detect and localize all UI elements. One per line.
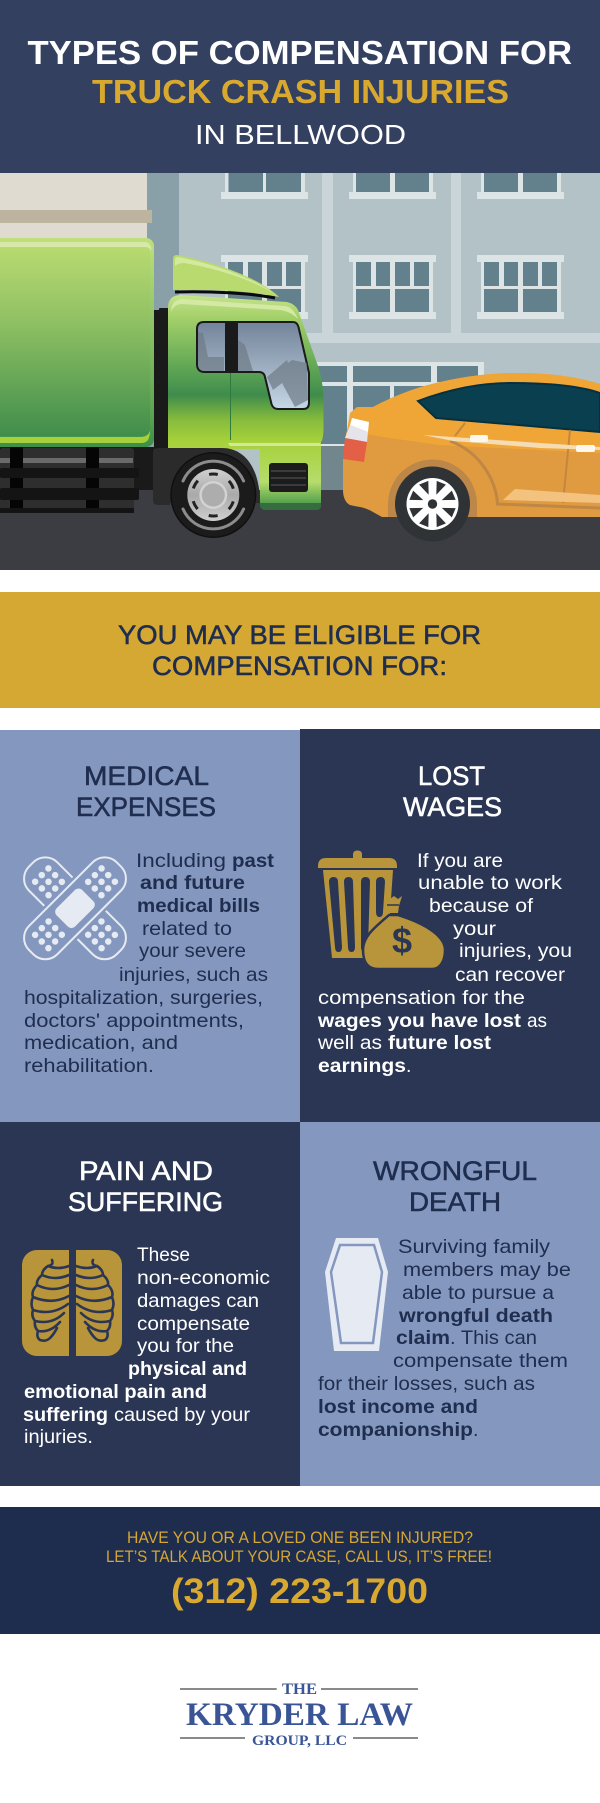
body text: These <box>137 1244 190 1266</box>
body text: medical bills <box>137 895 260 917</box>
body text: companionship <box>318 1419 473 1441</box>
body text: injuries. <box>24 1426 93 1448</box>
body text: compensation for the <box>318 987 525 1009</box>
body text: suffering <box>23 1404 108 1426</box>
door handles <box>470 435 488 442</box>
banner text <box>118 620 481 681</box>
heading: SUFFERING <box>68 1187 223 1217</box>
door line <box>230 372 232 440</box>
icon: bandages <box>17 850 133 966</box>
body text: hospitalization, surgeries, <box>24 987 263 1009</box>
body text: because of <box>429 895 534 917</box>
heading <box>373 1156 537 1217</box>
wheel arch <box>153 448 260 505</box>
header panel <box>0 0 600 173</box>
body text: injuries, such as <box>119 964 268 986</box>
logo: GROUP, LLC <box>252 1733 347 1749</box>
logo: THE <box>282 1681 317 1698</box>
body text: members may be <box>403 1259 571 1281</box>
heading <box>76 761 216 822</box>
call to action text: LET’S TALK ABOUT YOUR CASE, CALL US, IT’S FREE! <box>106 1548 492 1566</box>
body text: future lost <box>388 1032 492 1054</box>
banner text: YOU MAY BE ELIGIBLE FOR <box>118 620 481 650</box>
body text: as <box>527 1010 547 1032</box>
logo: KRYDER LAW <box>186 1697 413 1733</box>
body text: your severe <box>139 940 246 962</box>
heading: DEATH <box>409 1187 501 1217</box>
truck wheel <box>170 452 256 538</box>
ground floor window <box>316 362 484 448</box>
body text: related to <box>142 918 232 940</box>
chassis <box>0 308 168 513</box>
logo <box>180 1681 418 1749</box>
body text <box>24 850 275 1077</box>
car wheel <box>388 460 477 542</box>
heading: WAGES <box>403 792 502 822</box>
body text: . <box>473 1419 478 1441</box>
body text: physical and <box>128 1358 247 1380</box>
call to action text: HAVE YOU OR A LOVED ONE BEEN INJURED? <box>127 1529 473 1547</box>
body text: . This can <box>450 1327 537 1349</box>
body text: lost income and <box>318 1396 478 1418</box>
banner text: COMPENSATION FOR: <box>152 651 447 681</box>
door lines <box>455 423 570 503</box>
call to action text <box>106 1529 492 1566</box>
cab window <box>197 322 309 409</box>
car body <box>343 373 600 517</box>
body text: compensate them <box>393 1350 568 1372</box>
body text: you for the <box>137 1335 234 1357</box>
body text: . <box>406 1055 411 1077</box>
body text: non-economic <box>137 1267 270 1289</box>
heading: LOST <box>418 761 485 791</box>
icon: trash can and money bag <box>318 850 445 969</box>
body text: well as <box>317 1032 382 1054</box>
body text: damages can <box>137 1290 259 1312</box>
body text: can recover <box>455 964 566 986</box>
heading <box>403 761 502 822</box>
body text: If you are <box>417 850 503 872</box>
body text: wages you have lost <box>317 1010 522 1032</box>
body text: for their losses, such as <box>318 1373 535 1395</box>
panel: medical expenses <box>0 730 300 1122</box>
windows row 1 <box>221 173 564 199</box>
icon: rib cage <box>22 1250 122 1356</box>
body text: emotional pain and <box>24 1381 207 1403</box>
body text: earnings <box>318 1055 406 1077</box>
body text: injuries, you <box>459 940 572 962</box>
body text: able to pursue a <box>402 1282 554 1304</box>
building background <box>0 173 600 493</box>
body text: and future <box>140 872 245 894</box>
body text: claim <box>396 1327 450 1349</box>
body text <box>318 1236 571 1441</box>
call to action panel <box>0 1507 600 1634</box>
banner <box>0 592 600 708</box>
cab spoiler <box>173 255 279 298</box>
bumper strip <box>228 443 322 446</box>
body text: medication, and <box>24 1032 178 1054</box>
heading: EXPENSES <box>76 792 216 822</box>
body text: past <box>232 850 275 872</box>
panel: lost wages <box>300 729 600 1122</box>
windows row 2 <box>221 255 564 319</box>
body text: compensate <box>137 1313 250 1335</box>
body text: your <box>453 918 497 940</box>
cab body <box>168 295 324 510</box>
body text: unable to work <box>418 872 562 894</box>
body text: Including <box>136 850 226 872</box>
heading: WRONGFUL <box>373 1156 537 1186</box>
icon: coffin <box>325 1238 388 1351</box>
body text: doctors' appointments, <box>24 1010 244 1032</box>
road <box>0 490 600 570</box>
illustration: truck crash scene <box>0 173 600 570</box>
heading <box>68 1156 223 1217</box>
heading: MEDICAL <box>84 761 209 791</box>
title line 3: IN BELLWOOD <box>195 119 406 150</box>
grille <box>269 463 308 492</box>
taillight <box>343 418 369 462</box>
title line 1: TYPES OF COMPENSATION FOR <box>28 35 572 72</box>
body reflection <box>423 435 600 450</box>
lower bumper band <box>260 503 321 510</box>
heading: PAIN AND <box>79 1156 213 1186</box>
body text: rehabilitation. <box>24 1055 154 1077</box>
phone number: (312) 223-1700 <box>171 1572 428 1611</box>
car upper body <box>347 373 600 453</box>
icon: trash can and money bag: $ <box>392 920 412 961</box>
panel: wrongful death <box>300 1122 600 1486</box>
car <box>343 373 600 542</box>
cargo box <box>0 238 154 447</box>
body text: Surviving family <box>398 1236 550 1258</box>
car side window <box>418 383 600 432</box>
title line 2: TRUCK CRASH INJURIES <box>92 74 509 111</box>
body text: wrongful death <box>398 1305 553 1327</box>
body text <box>317 850 572 1077</box>
panel: pain and suffering <box>0 1122 300 1486</box>
truck <box>0 238 324 538</box>
body text: caused by your <box>114 1404 251 1426</box>
body text <box>23 1244 270 1448</box>
